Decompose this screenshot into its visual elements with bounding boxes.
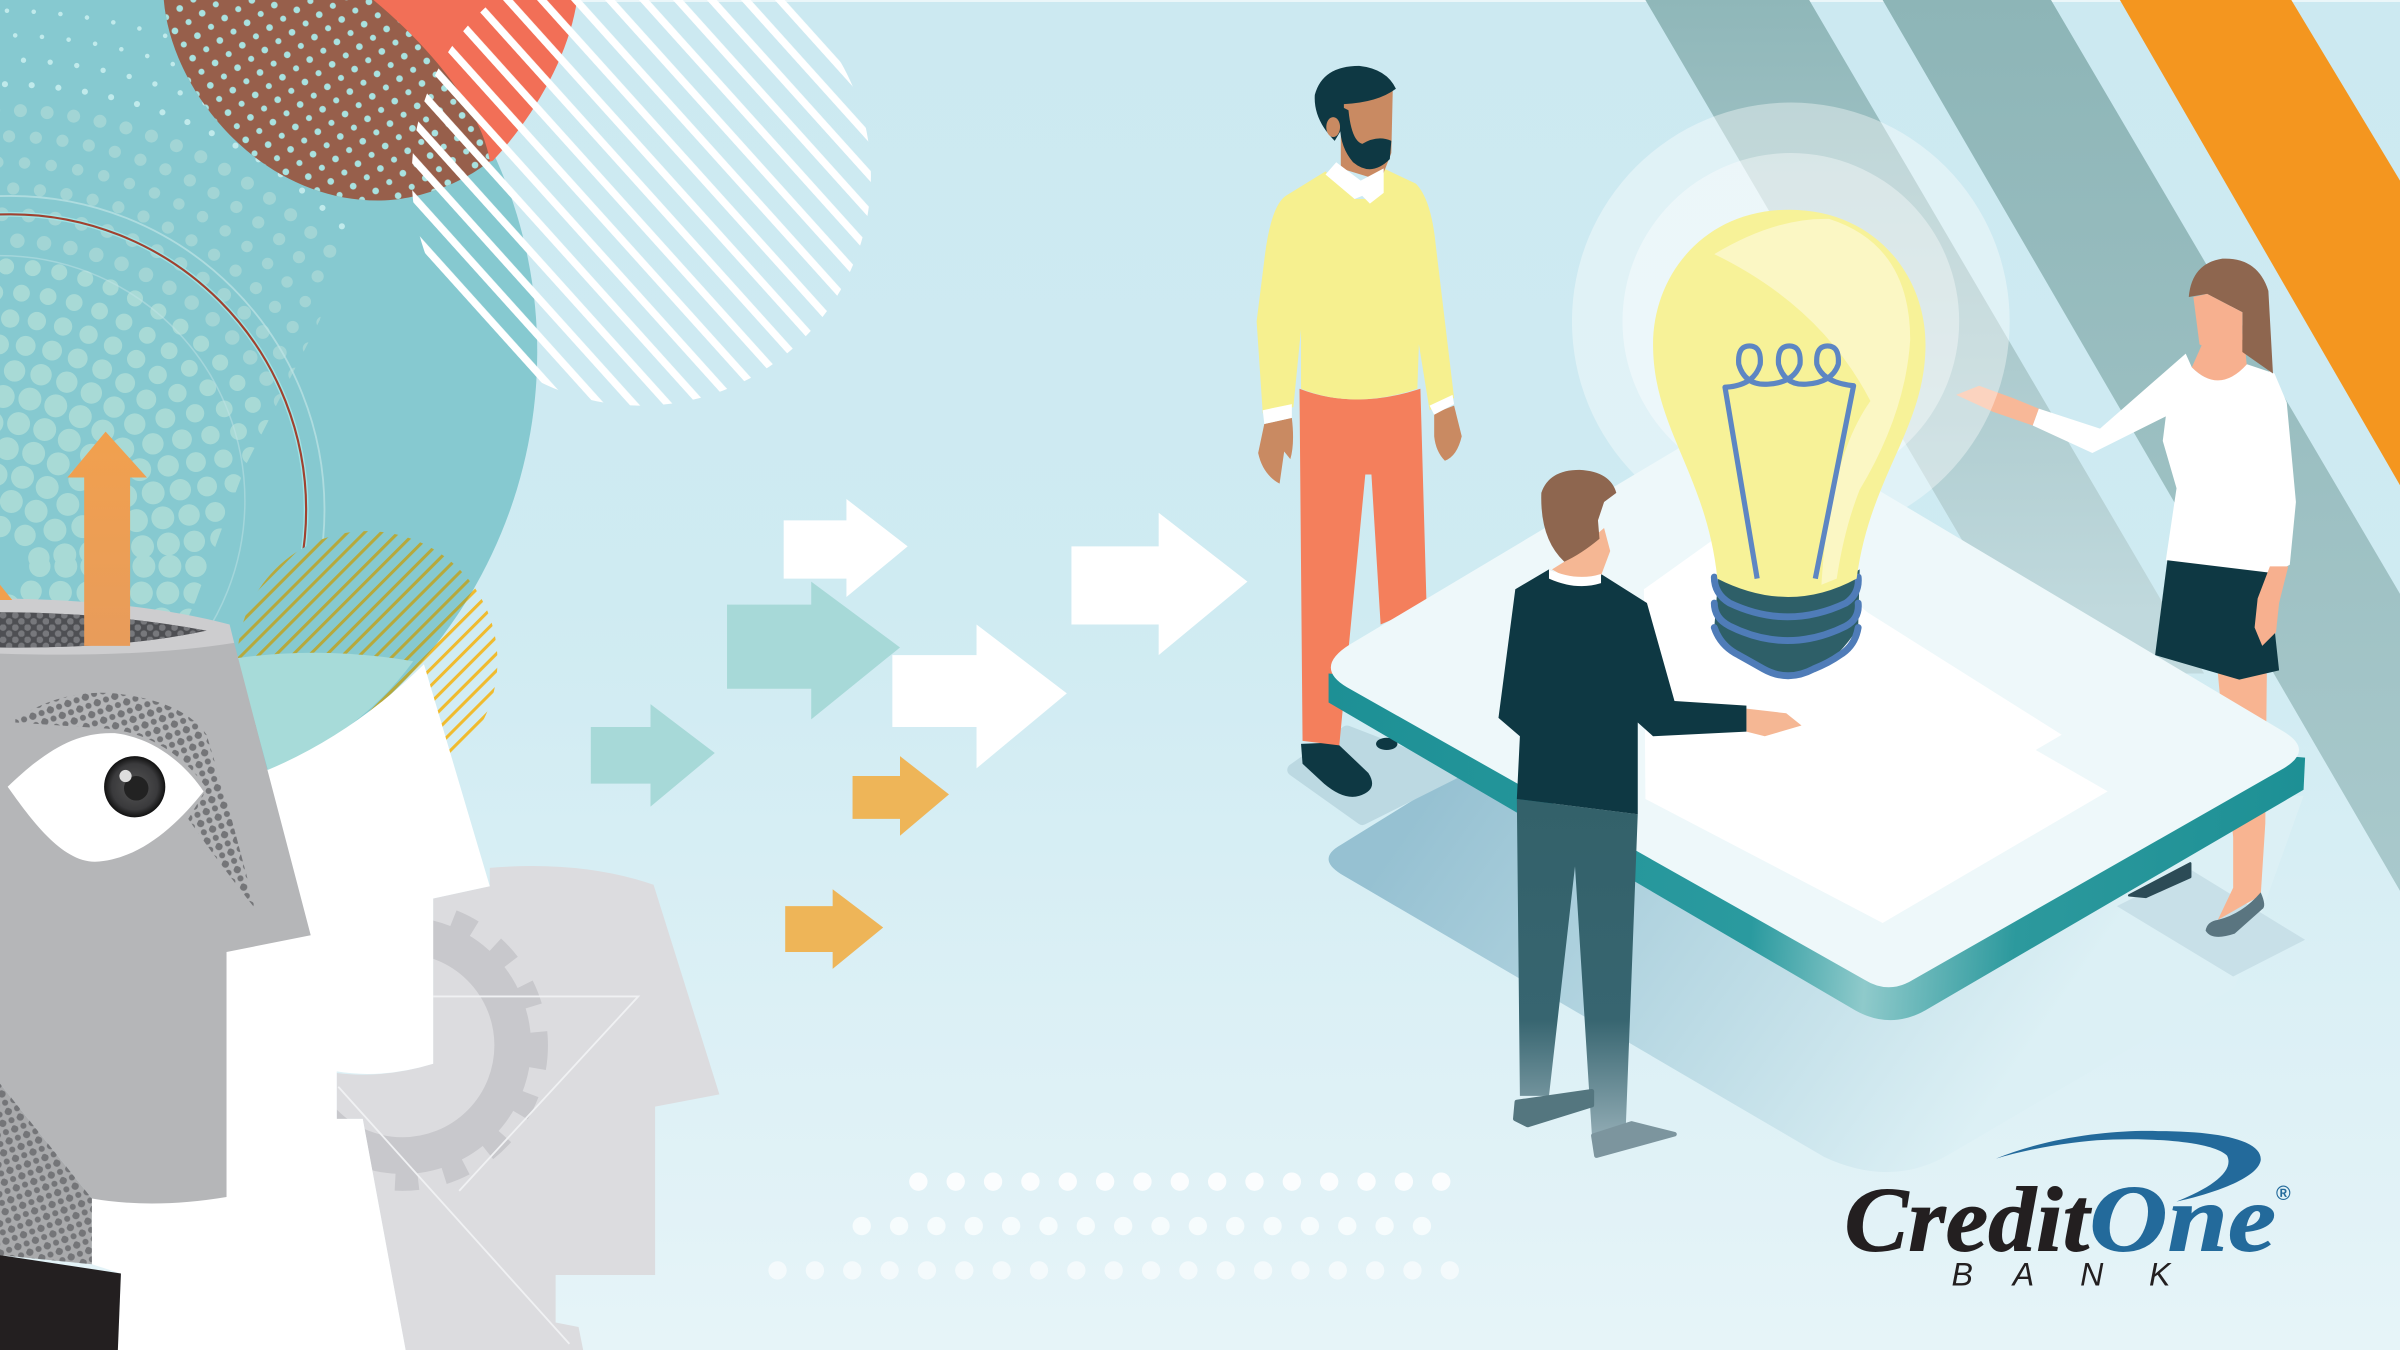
gear <box>337 910 548 1191</box>
foot shadow man <box>1293 732 1454 819</box>
bearded man figure <box>1257 66 1462 797</box>
neck halftone <box>0 1084 92 1264</box>
jumper <box>1498 569 1746 814</box>
sweater <box>1257 168 1454 413</box>
foot shadow woman <box>2117 869 2305 977</box>
beard <box>1340 107 1391 169</box>
bulb base <box>1714 569 1860 679</box>
main grey head <box>0 432 311 1350</box>
hip hand <box>2255 566 2288 646</box>
registered mark: ® <box>2276 1183 2291 1205</box>
arrow: white small <box>784 499 908 597</box>
triangle lines <box>338 996 638 1344</box>
skirt <box>2155 560 2279 680</box>
bulb glass <box>1653 210 1926 597</box>
arrow: white mid <box>892 624 1067 768</box>
logo swoosh <box>1996 1131 2261 1202</box>
diagonal stripes top right <box>1645 0 2400 891</box>
eyebrow halftone <box>15 693 256 909</box>
shirt <box>2033 354 2296 577</box>
eye <box>8 733 204 862</box>
hair <box>1541 470 1616 562</box>
hair <box>1315 66 1396 141</box>
reaching hand <box>1956 386 2039 426</box>
hair <box>2189 259 2273 373</box>
trousers <box>1299 389 1427 745</box>
table side <box>1329 673 2305 1020</box>
Credit One Bank logo <box>1844 1131 2291 1293</box>
head opening <box>0 612 207 648</box>
left hand <box>1258 418 1293 484</box>
bulb highlight <box>1714 219 1910 585</box>
wordmark One: One <box>2089 1166 2276 1272</box>
cuffs <box>1263 395 1454 424</box>
table <box>1329 416 2305 1020</box>
orange stripe <box>2120 0 2400 485</box>
collar <box>1549 569 1601 586</box>
white panel <box>1644 528 2108 923</box>
light teal head top <box>237 653 413 770</box>
woman figure <box>1956 259 2296 937</box>
collar <box>1326 162 1384 204</box>
neck and face <box>1341 86 1393 181</box>
arrow: white large <box>1071 513 1247 655</box>
second head, pale grey <box>336 866 720 1350</box>
black collar <box>0 1255 121 1350</box>
pupil <box>104 756 165 817</box>
right shoe <box>2206 892 2264 937</box>
white head <box>92 664 490 1350</box>
arrow: teal small <box>591 704 715 807</box>
left shoe <box>2129 863 2190 897</box>
head rim <box>0 598 234 655</box>
light bulb <box>1653 210 1926 679</box>
trousers <box>1517 799 1638 1134</box>
arrow: orange up <box>67 432 147 646</box>
neck <box>1552 528 1610 582</box>
man from behind figure <box>1498 470 1802 1156</box>
table floor shadow <box>1329 765 2304 1172</box>
arrows flock <box>591 499 1247 969</box>
left shoe <box>1515 1091 1592 1125</box>
legs <box>2218 673 2267 920</box>
shoe <box>1301 742 1372 797</box>
yellow striped circle <box>238 531 498 753</box>
face <box>2193 294 2242 354</box>
bulb glow rings <box>1572 103 2010 540</box>
arrow: orange lower <box>785 889 883 969</box>
dotted rows <box>778 1182 1454 1270</box>
neck <box>2192 334 2247 381</box>
arrow: orange upper <box>853 756 949 836</box>
filament <box>1725 346 1854 579</box>
brown dotted circle <box>164 0 490 201</box>
white striped circle <box>412 0 871 406</box>
ear <box>1326 117 1340 137</box>
far shoe <box>1376 738 1397 750</box>
wordmark Credit: Credit <box>1844 1169 2092 1271</box>
red segment <box>367 0 577 171</box>
large teal circle <box>0 0 537 825</box>
hand <box>1746 709 1802 736</box>
right hand <box>1434 406 1462 461</box>
thin red and pale circles <box>0 196 324 823</box>
halftone dot field <box>0 8 345 616</box>
right shoe <box>1593 1123 1674 1156</box>
table top <box>1331 416 2299 987</box>
arrow: teal mid <box>727 582 900 719</box>
arrow tip left <box>0 585 12 600</box>
wordmark Bank: BANK <box>1952 1257 2172 1293</box>
